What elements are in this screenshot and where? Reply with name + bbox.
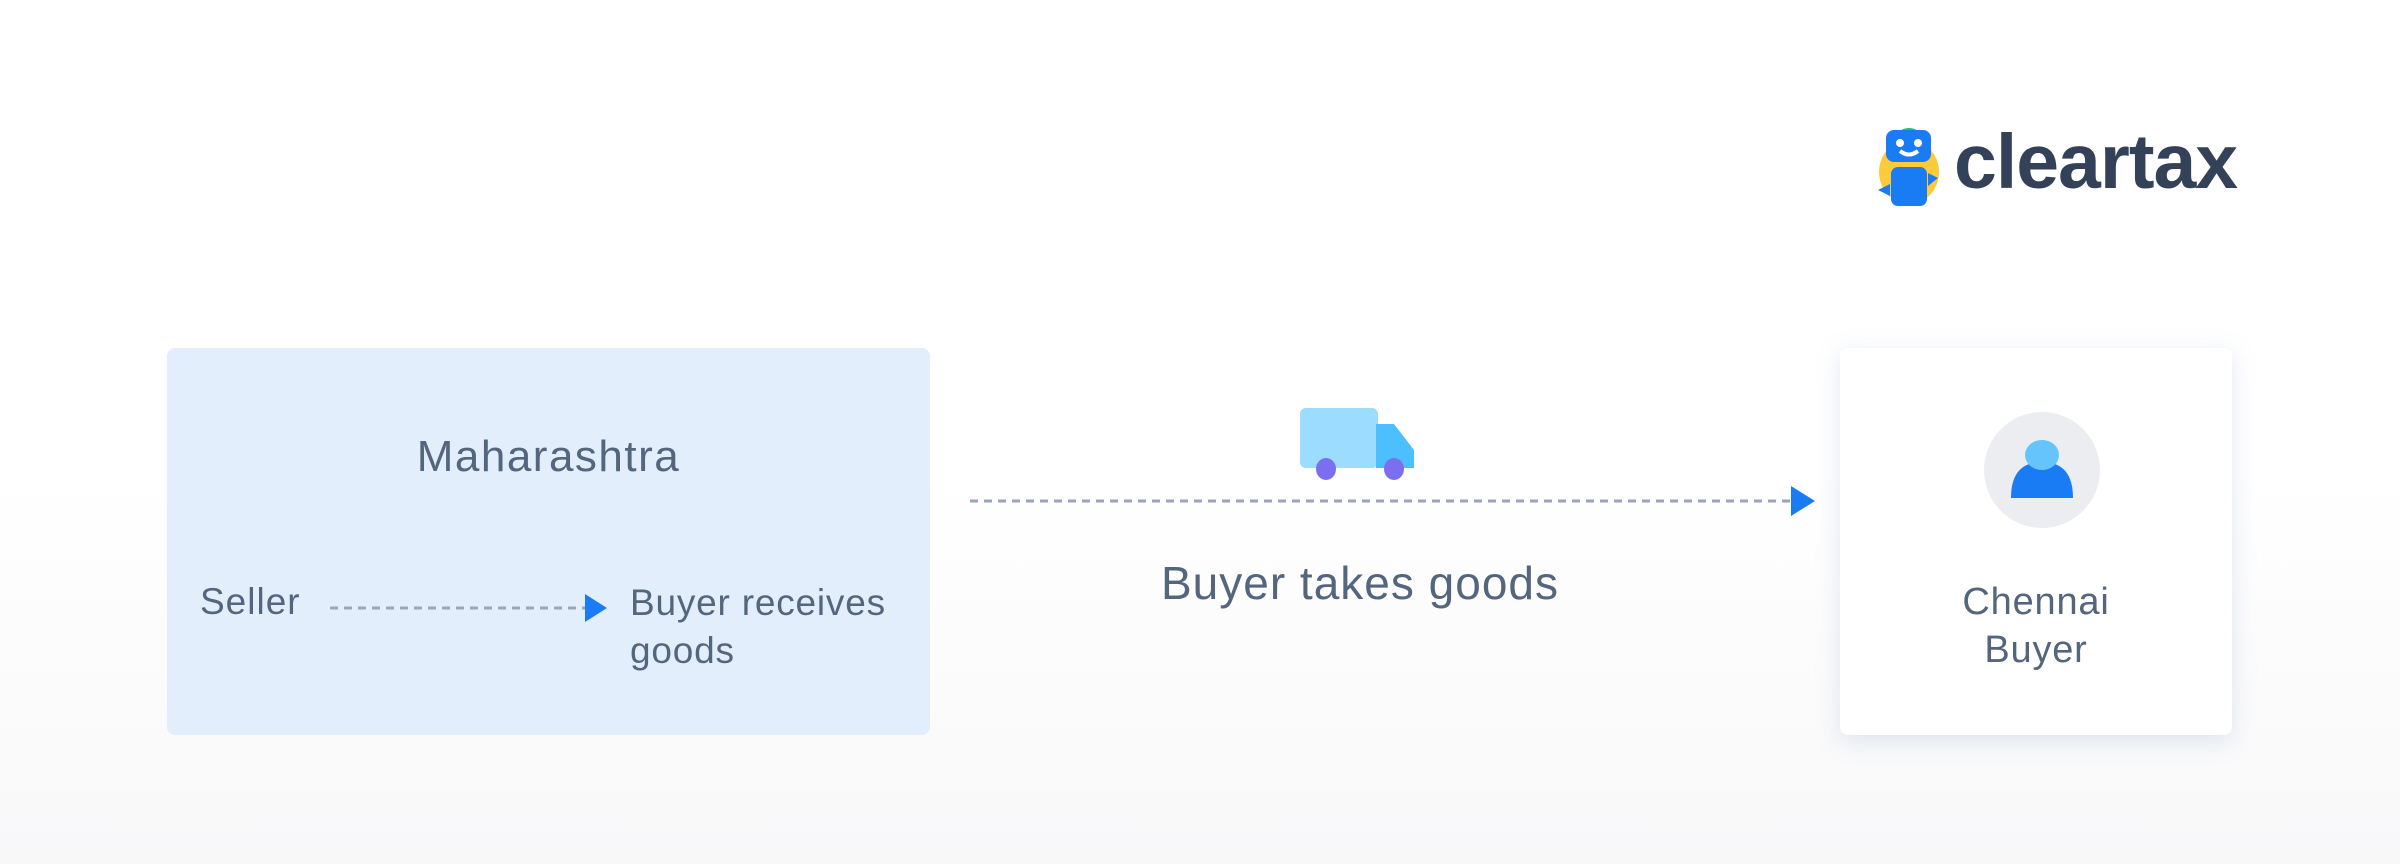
arrow: main transport <box>970 486 1815 516</box>
text: Buyer receives goods: Buyer receives <box>630 582 886 623</box>
text: Buyer receives goods <box>630 582 886 671</box>
heading: Maharashtra: Maharashtra <box>417 432 680 481</box>
logo text: cleartax <box>1954 119 2237 205</box>
text: Chennai Buyer: Buyer <box>1984 629 2088 671</box>
icon: person <box>1984 412 2100 528</box>
arrow: seller to buyer <box>330 594 607 622</box>
logo <box>1878 119 2238 206</box>
text: Chennai Buyer: Chennai <box>1962 581 2110 623</box>
text: Seller: Seller <box>200 581 301 622</box>
icon: robot <box>1878 128 1939 206</box>
panel: Chennai Buyer <box>1840 348 2232 735</box>
text: Chennai Buyer <box>1962 581 2110 671</box>
text: Buyer takes goods: Buyer takes goods <box>1161 557 1559 609</box>
text: Buyer receives goods: goods <box>630 630 735 671</box>
panel: Maharashtra <box>167 348 930 735</box>
icon: truck <box>1300 408 1414 480</box>
